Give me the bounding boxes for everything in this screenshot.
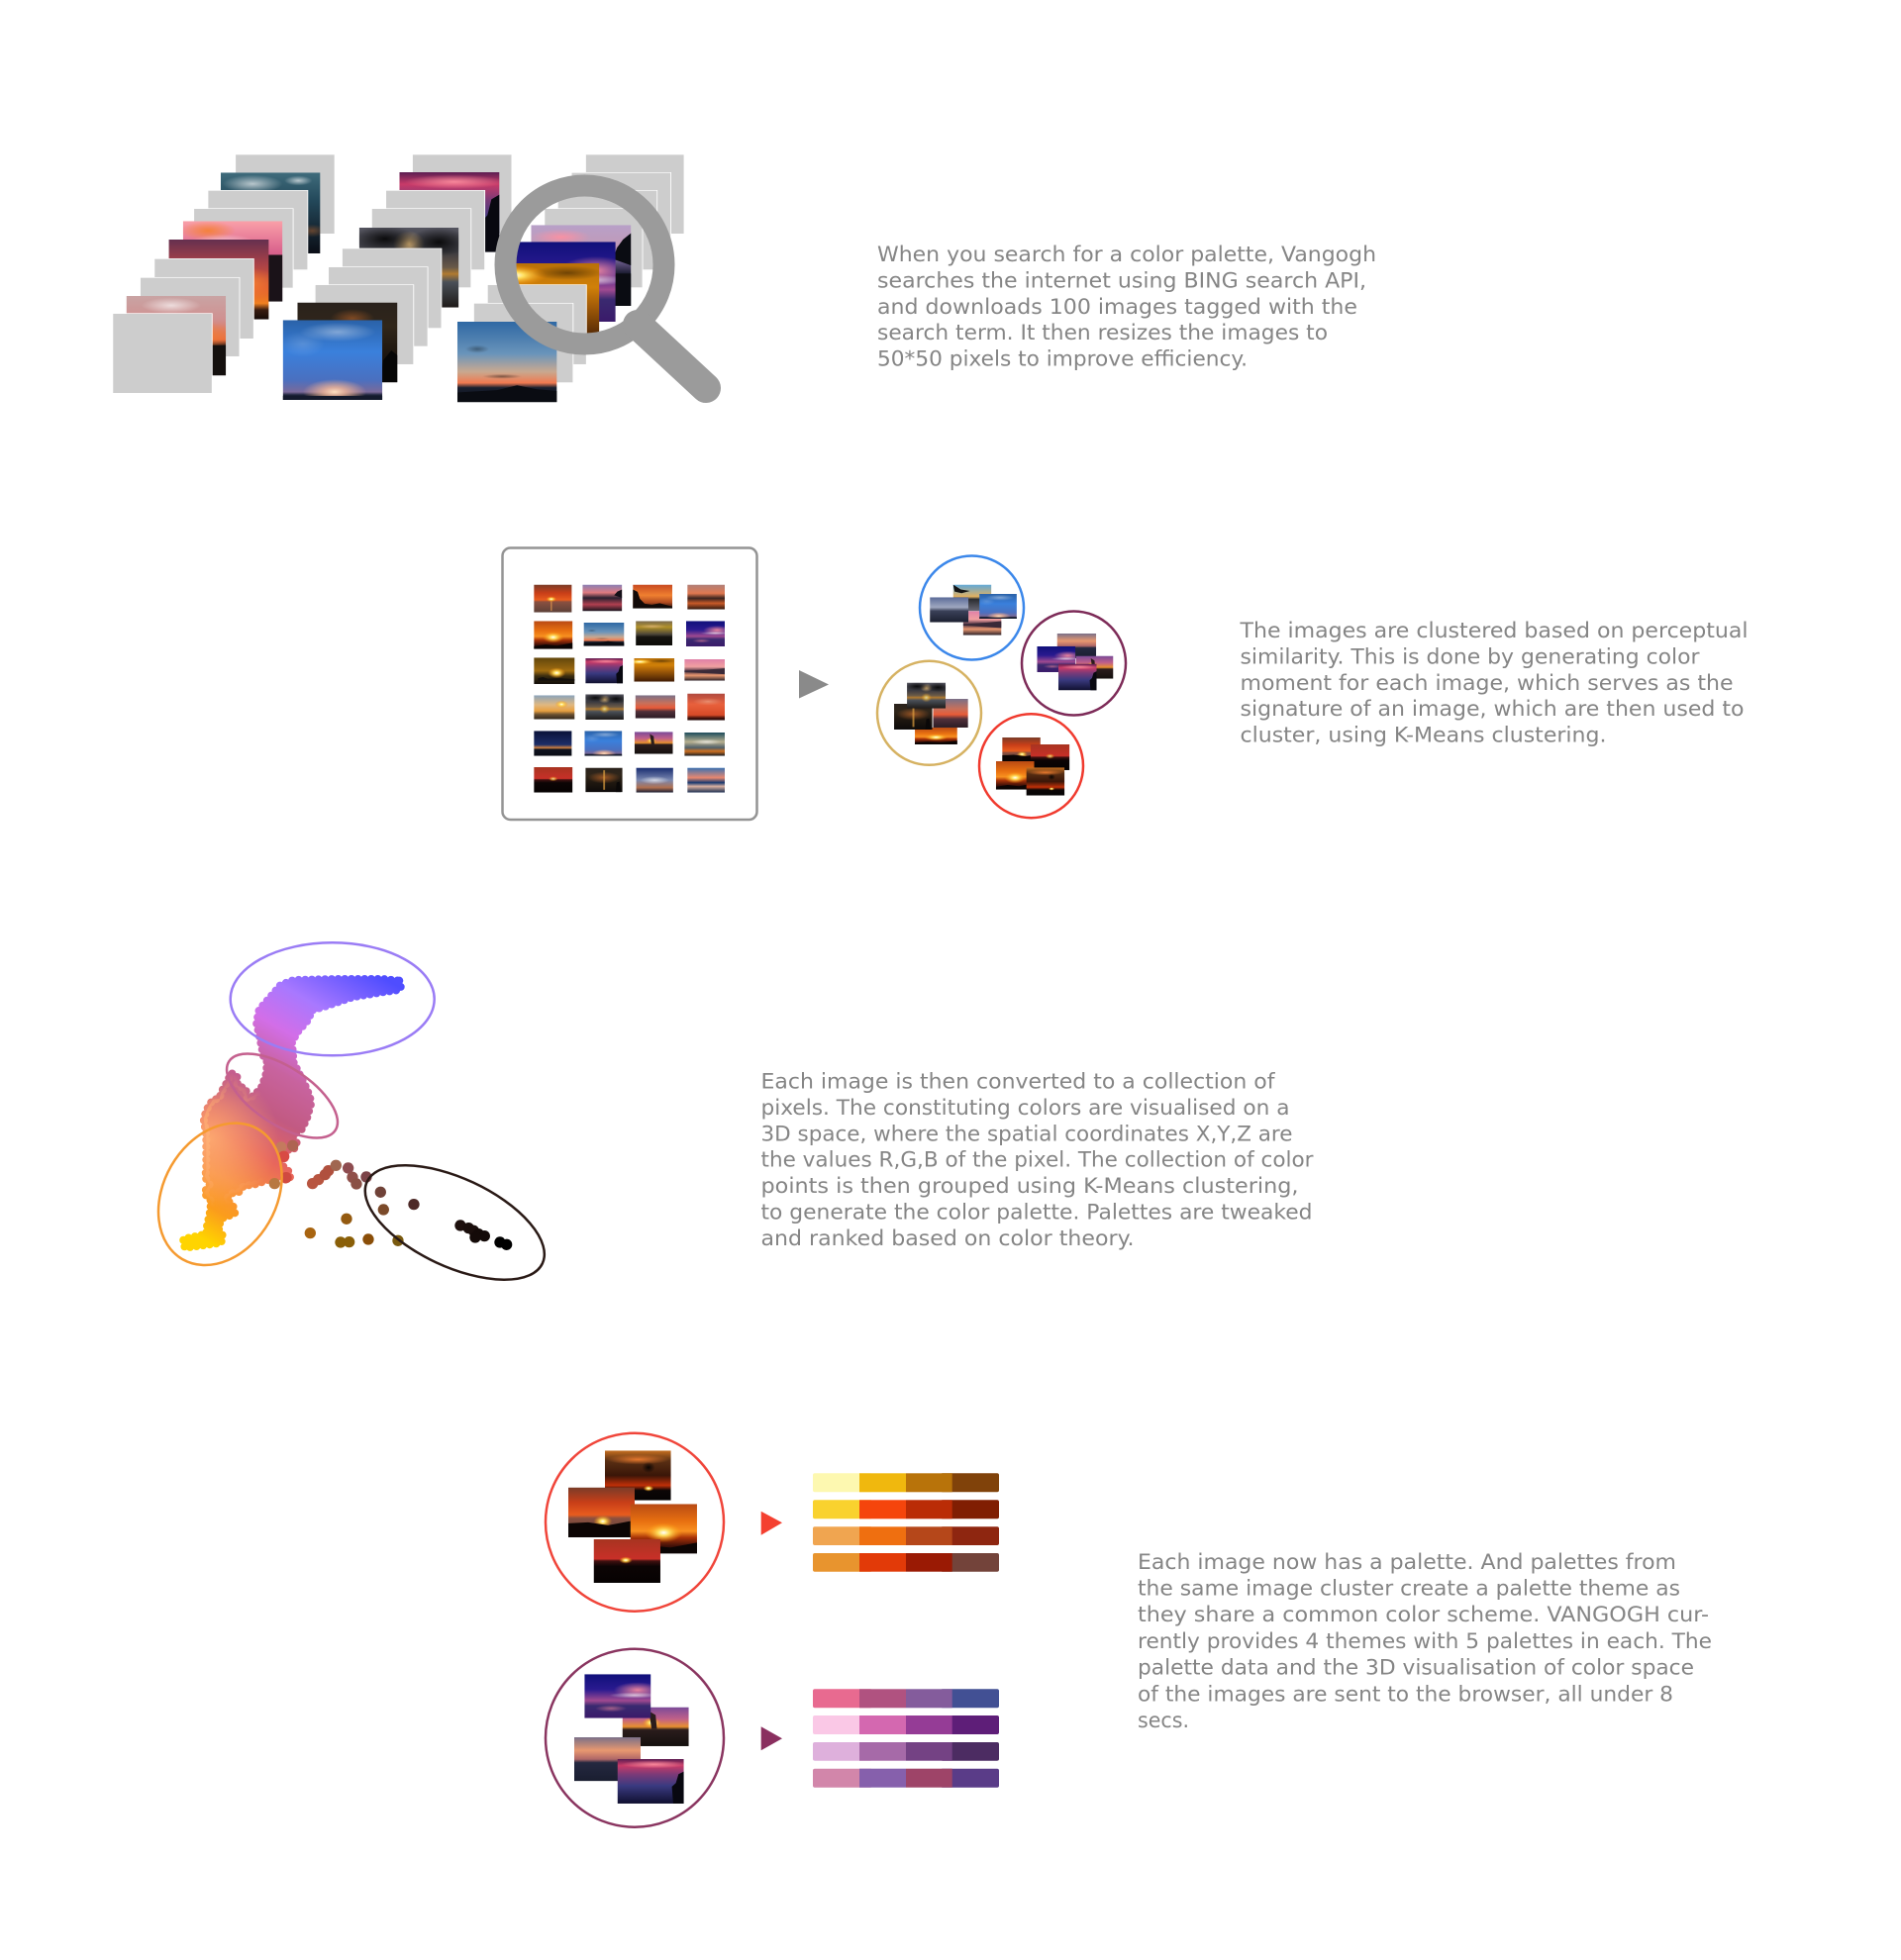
text: palette themes description: the same image cluster create a palette theme as [1138, 1576, 1680, 1600]
text: color space description: pixels. The constituting colors are visualised on a [760, 1096, 1289, 1120]
image stack: left [113, 154, 335, 393]
text: palette themes description: secs. [1138, 1709, 1189, 1732]
palette row 6 [813, 1715, 999, 1734]
cluster ring: pink [214, 1037, 350, 1154]
text: image search description: searches the internet using BING search API, [877, 268, 1366, 292]
panel: purple theme cluster [546, 1649, 724, 1827]
text: image search description: When you search for a color palette, Vangogh [877, 243, 1376, 266]
image stack: right [457, 154, 684, 402]
panel: red theme cluster [546, 1433, 724, 1612]
cluster: red [979, 714, 1083, 818]
arrow: red theme [761, 1512, 782, 1535]
palettes: red theme [813, 1473, 999, 1572]
text: color space description: 3D space, where the spatial coordinates X,Y,Z are [760, 1122, 1293, 1145]
cluster: gold [877, 661, 981, 765]
cluster: blue [920, 556, 1024, 659]
palette row 1 [813, 1473, 999, 1492]
text: palette themes description: of the images are sent to the browser, all under 8 [1138, 1682, 1673, 1706]
cluster: purple [1022, 612, 1126, 715]
palette row 3 [813, 1526, 999, 1545]
text: palette themes description: they share a common color scheme. VANGOGH cur- [1138, 1603, 1709, 1626]
text: clustering description: moment for each image, which serves as the [1240, 671, 1733, 695]
text: clustering description: similarity. This is done by generating color [1240, 644, 1700, 668]
text: palette themes description: palette data and the 3D visualisation of color space [1138, 1656, 1694, 1680]
text: palette themes description: rently provides 4 themes with 5 palettes in each. The [1138, 1629, 1712, 1653]
panel: image search [113, 154, 706, 405]
text: clustering description: signature of an image, which are then used to [1240, 697, 1745, 721]
chart: 3D color space scatter [134, 942, 561, 1304]
cluster ring: purple [231, 942, 435, 1055]
palette row 2 [813, 1500, 999, 1519]
text: image search description [877, 243, 1376, 371]
cluster ring: dark [349, 1141, 561, 1304]
text: image search description: search term. It then resizes the images to [877, 321, 1328, 344]
icon: magnifying glass [505, 186, 706, 388]
palette row 4 [813, 1553, 999, 1572]
text: image search description: and downloads 100 images tagged with the [877, 295, 1357, 319]
text: color space description: and ranked based on color theory. [760, 1226, 1135, 1250]
color point cloud [183, 979, 512, 1250]
arrow: purple theme [761, 1726, 782, 1750]
text: palette themes description: Each image now has a palette. And palettes from [1138, 1550, 1676, 1574]
palette row 5 [813, 1689, 999, 1708]
text: color space description [760, 1069, 1314, 1250]
text: color space description: Each image is then converted to a collection of [760, 1069, 1275, 1093]
arrow: grid to clusters [799, 670, 829, 699]
palettes: purple theme [813, 1689, 999, 1788]
text: color space description: to generate the color palette. Palettes are tweaked [760, 1200, 1313, 1224]
text: clustering description: cluster, using K-Means clustering. [1240, 724, 1606, 747]
palette row 8 [813, 1769, 999, 1788]
text: image search description: 50*50 pixels to improve efficiency. [877, 347, 1248, 371]
text: palette themes description [1138, 1550, 1712, 1732]
text: clustering description: The images are clustered based on perceptual [1239, 619, 1749, 642]
panel: image grid [503, 548, 756, 820]
text: clustering description [1239, 619, 1749, 747]
image stack: middle [281, 154, 512, 405]
text: color space description: the values R,G,B of the pixel. The collection of color [760, 1148, 1314, 1172]
cluster ring: orange [134, 1101, 307, 1288]
text: color space description: points is then grouped using K-Means clustering, [760, 1174, 1299, 1198]
palette row 7 [813, 1742, 999, 1761]
image thumbnails grid [534, 585, 731, 793]
